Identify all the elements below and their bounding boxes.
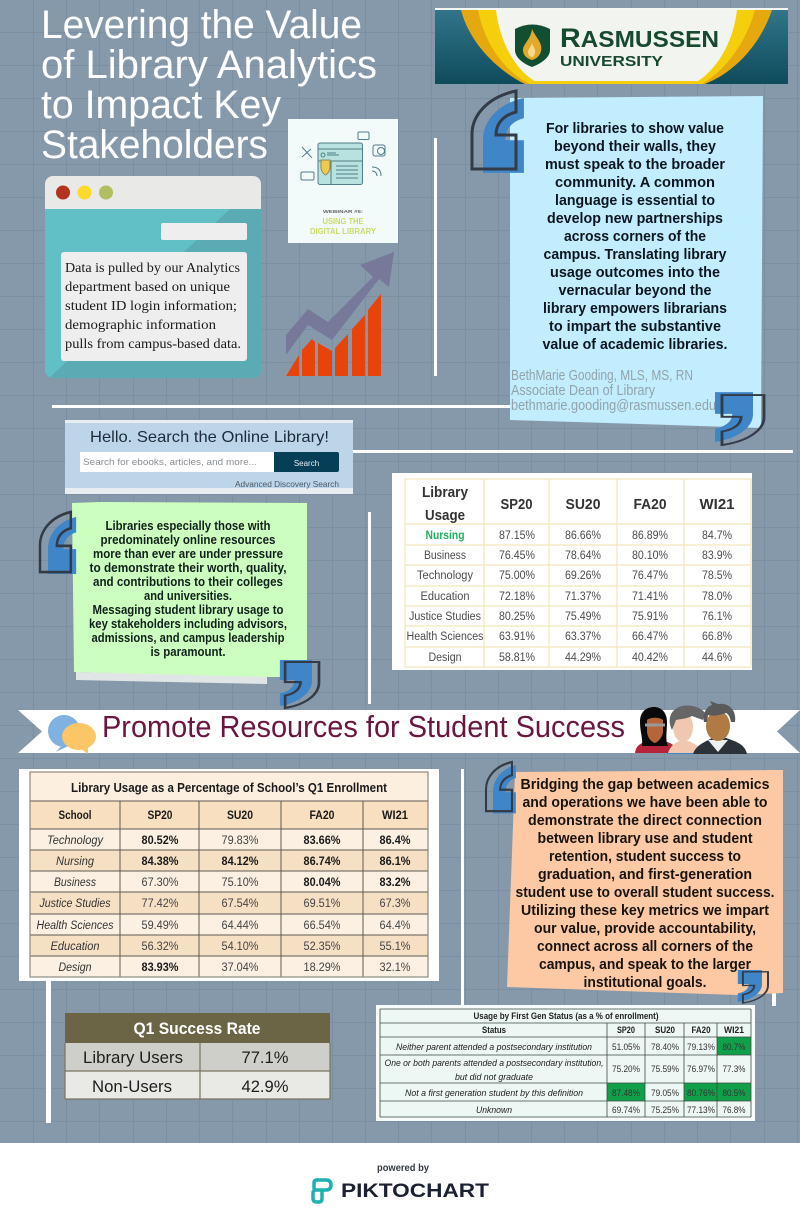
- table rows: 69.74%: [612, 1105, 640, 1116]
- table rows: 78.64%: [565, 550, 601, 562]
- table rows: 77.1%: [242, 1048, 288, 1067]
- text: quote body: predominately online resources: [100, 533, 276, 547]
- table rows: 32.1%: [380, 962, 410, 974]
- icon: opening quote mark: [40, 512, 76, 574]
- table rows: 77.13%: [687, 1105, 715, 1116]
- table rows: 76.97%: [687, 1064, 715, 1075]
- table rows: 84.12%: [222, 856, 258, 868]
- table rows: 52.35%: [304, 941, 340, 953]
- table rows: Technology: [417, 570, 473, 582]
- table rows: 80.04%: [304, 877, 340, 889]
- text: quote body: more than ever are under pressure: [93, 547, 283, 561]
- text: quote body: graduation, and first-generation: [538, 867, 752, 883]
- text: quote body: and operations we have been able to: [522, 795, 768, 811]
- table rows: 71.37%: [565, 591, 601, 603]
- search button: [274, 452, 339, 472]
- text: quote body: [89, 519, 287, 659]
- text: webinar caption: DIGITAL LIBRARY: [310, 227, 377, 236]
- text: quote body: is paramount.: [150, 645, 226, 659]
- table rows: Library Users: [83, 1048, 183, 1067]
- table rows: 63.37%: [565, 631, 601, 643]
- panel: green quote: [40, 502, 319, 708]
- table rows: 51.05%: [612, 1042, 640, 1053]
- text: quote body: student use to overall student success.: [516, 885, 774, 901]
- table rows: 67.54%: [222, 898, 258, 910]
- text: webinar caption: [310, 209, 377, 236]
- table rows: 66.47%: [632, 631, 668, 643]
- text: quote body: vernacular beyond the: [558, 283, 712, 299]
- table header: Library: [422, 484, 469, 501]
- table rows: [406, 530, 732, 664]
- table: Q1 success rate: [65, 1013, 330, 1099]
- title: to Impact Key: [41, 83, 281, 127]
- text: quote body: to impart the substantive: [549, 319, 721, 335]
- table rows: 64.44%: [222, 920, 258, 932]
- table rows: 44.29%: [565, 652, 601, 664]
- table rows: 75.91%: [632, 611, 668, 623]
- table rows: 18.29%: [304, 962, 340, 974]
- text: data source note: department based on unique: [65, 279, 230, 294]
- table rows: 63.91%: [499, 631, 535, 643]
- table rows: 37.04%: [222, 962, 258, 974]
- table rows: 72.18%: [499, 591, 535, 603]
- table rows: 80.10%: [632, 550, 668, 562]
- text: quote body: between library use and student: [538, 831, 753, 847]
- panel: webinar thumbnail: [288, 119, 398, 243]
- text: quote body: library empowers librarians: [543, 301, 727, 317]
- table rows: 80.25%: [499, 611, 535, 623]
- table rows: Not a first generation student by this definition: [405, 1088, 583, 1099]
- text: quote body: and universities.: [144, 589, 232, 603]
- icon: closing quote mark: [280, 660, 319, 708]
- text: Piktochart wordmark: PIKTOCHART: [341, 1180, 489, 1202]
- table rows: Education: [50, 941, 100, 953]
- text: quote body: Bridging the gap between academics: [520, 777, 770, 793]
- text: quote body: usage outcomes into the: [550, 265, 720, 281]
- table header: Usage: [425, 507, 465, 524]
- table rows: Non-Users: [92, 1077, 172, 1096]
- table rows: 59.49%: [142, 920, 178, 932]
- table rows: 67.3%: [380, 898, 410, 910]
- table: library usage by school: [392, 473, 752, 670]
- table rows: 79.83%: [222, 835, 258, 847]
- icon: digital library window: [301, 132, 385, 184]
- table rows: 83.2%: [380, 877, 410, 889]
- table rows: 64.4%: [380, 920, 410, 932]
- text: quote body: must speak to the broader: [545, 157, 725, 173]
- text: quote body: [542, 121, 728, 353]
- text: data source note: Data is pulled by our Analytics: [65, 260, 240, 275]
- title: Levering the Value: [41, 3, 362, 47]
- table rows: [36, 835, 410, 974]
- table rows: 83.66%: [304, 835, 340, 847]
- icon: Piktochart logo mark: [313, 1180, 331, 1202]
- text: quote body: across corners of the: [564, 229, 706, 245]
- text: attribution: Associate Dean of Library: [511, 383, 656, 399]
- table header: Status: [482, 1025, 506, 1036]
- heading: search prompt: Hello. Search the Online Library!: [90, 429, 329, 446]
- table rows: 76.45%: [499, 550, 535, 562]
- text: data source note: demographic information: [65, 317, 216, 332]
- table rows: 83.93%: [142, 962, 178, 974]
- text: quote body: Libraries especially those with: [106, 519, 270, 533]
- panel: online library search box: [65, 420, 353, 494]
- table rows: 75.49%: [565, 611, 601, 623]
- table header: SU20: [655, 1025, 675, 1036]
- text: quote body: Messaging student library usage to: [92, 603, 284, 617]
- table rows: [384, 1042, 746, 1116]
- table rows: Design: [58, 962, 92, 974]
- table rows: 77.3%: [722, 1064, 746, 1075]
- table rows: 44.6%: [702, 652, 732, 664]
- table rows: 86.4%: [380, 835, 410, 847]
- icon: shield with flame: [515, 24, 550, 67]
- table header: SP20: [617, 1025, 635, 1036]
- table rows: 75.20%: [612, 1064, 640, 1075]
- table rows: 66.8%: [702, 631, 732, 643]
- table rows: 80.52%: [142, 835, 178, 847]
- table rows: 83.9%: [702, 550, 732, 562]
- table rows: Nursing: [426, 530, 464, 542]
- text: data source note: pulls from campus-based data.: [65, 336, 241, 351]
- text: quote body: [516, 777, 774, 991]
- table rows: 69.26%: [565, 570, 601, 582]
- table header: SP20: [148, 810, 172, 822]
- table header: SP20: [500, 496, 532, 513]
- text: quote body: community. A common: [555, 175, 715, 191]
- table rows: Health Sciences: [406, 631, 484, 643]
- footer: powered by Piktochart: powered by: [377, 1163, 429, 1174]
- icon: speech bubbles: [48, 715, 96, 754]
- table rows: 86.74%: [304, 856, 340, 868]
- table rows: 55.1%: [380, 941, 410, 953]
- text: quote body: institutional goals.: [584, 975, 706, 991]
- table rows: One or both parents attended a postsecondary institution,: [384, 1058, 604, 1069]
- table rows: 69.51%: [304, 898, 340, 910]
- section banner: promote resources: [18, 701, 800, 754]
- icon: three students: [635, 701, 747, 754]
- table rows: 86.1%: [380, 856, 410, 868]
- title: of Library Analytics: [41, 43, 377, 87]
- text: quote body: to demonstrate their worth, quality,: [90, 561, 286, 575]
- text: quote body: language is essential to: [555, 193, 715, 209]
- table rows: 58.81%: [499, 652, 535, 664]
- table header: Q1 Success Rate: [134, 1019, 260, 1038]
- icon: closing quote mark: [738, 970, 768, 1003]
- panel: orange quote: [486, 762, 783, 1003]
- table rows: Business: [54, 877, 96, 889]
- search input: [80, 452, 274, 472]
- table rows: but did not graduate: [455, 1072, 533, 1083]
- text: attribution: bethmarie.gooding@rasmussen.edu: [511, 398, 716, 414]
- table rows: 79.05%: [651, 1088, 679, 1099]
- table header: [58, 810, 409, 822]
- table header: WI21: [724, 1025, 745, 1036]
- table rows: 78.0%: [702, 591, 732, 603]
- table: usage as percentage of Q1 enrollment: [19, 769, 439, 981]
- text: webinar caption: USING THE: [322, 217, 364, 226]
- search button: Search: [294, 459, 319, 468]
- heading: section title: Promote Resources for Student Success: [102, 709, 625, 744]
- table rows: 87.15%: [499, 530, 535, 542]
- table rows: 75.59%: [651, 1064, 679, 1075]
- text: quote body: demonstrate the direct connection: [528, 813, 762, 829]
- table rows: 80.7%: [722, 1042, 746, 1053]
- search input: Search for ebooks, articles, and more...: [83, 457, 257, 468]
- table rows: Nursing: [56, 856, 95, 868]
- text: university name: UNIVERSITY: [560, 53, 663, 70]
- text: quote body: admissions, and campus leadership: [92, 631, 285, 645]
- title: Stakeholders: [41, 123, 268, 167]
- table rows: 40.42%: [632, 652, 668, 664]
- table rows: 78.5%: [702, 570, 732, 582]
- table rows: 71.41%: [632, 591, 668, 603]
- table rows: 54.10%: [222, 941, 258, 953]
- table rows: Health Sciences: [36, 920, 114, 932]
- logo: Rasmussen University banner: [435, 8, 788, 84]
- table rows: 80.5%: [722, 1088, 746, 1099]
- divider lines: [46, 138, 793, 1123]
- table rows: 86.89%: [632, 530, 668, 542]
- table rows: 56.32%: [142, 941, 178, 953]
- footer: powered by Piktochart: [0, 1143, 800, 1223]
- table title: Usage by First Gen Status (as a % of enrollment): [474, 1011, 658, 1022]
- text: university name: RASMUSSEN: [560, 23, 719, 53]
- table rows: [83, 1048, 288, 1096]
- table rows: 66.54%: [304, 920, 340, 932]
- text: quote body: key stakeholders including advisors,: [89, 617, 287, 631]
- table header: [482, 1025, 745, 1036]
- text: attribution: [511, 368, 716, 414]
- text: quote body: campus, and speak to the larger: [539, 957, 751, 973]
- table rows: Technology: [47, 835, 104, 847]
- table rows: 84.38%: [142, 856, 178, 868]
- table title: Library Usage as a Percentage of School’s Q1 Enrollment: [71, 780, 388, 795]
- table rows: 42.9%: [242, 1077, 288, 1096]
- panel: browser window with data note: [45, 176, 261, 378]
- icon: closing quote mark: [715, 392, 764, 445]
- table header: FA20: [634, 496, 666, 513]
- table rows: 84.7%: [702, 530, 732, 542]
- text: quote body: Utilizing these key metrics we impart: [521, 903, 769, 919]
- text: quote body: and contributions to their colleges: [93, 575, 283, 589]
- table rows: Business: [424, 550, 466, 562]
- table header: WI21: [382, 810, 409, 822]
- text: attribution: BethMarie Gooding, MLS, MS, RN: [511, 368, 693, 384]
- icon: growth arrow and bar chart: [286, 252, 394, 376]
- table rows: 76.1%: [702, 611, 732, 623]
- text: webinar caption: WEBINAR #5:: [323, 209, 364, 215]
- table header: FA20: [310, 810, 334, 822]
- text: data source note: student ID login information;: [65, 298, 237, 313]
- icon: opening quote mark: [472, 91, 524, 173]
- table header: [422, 484, 734, 524]
- table rows: 75.10%: [222, 877, 258, 889]
- text: quote body: For libraries to show value: [546, 121, 724, 137]
- table rows: 76.47%: [632, 570, 668, 582]
- table rows: Unknown: [476, 1105, 512, 1116]
- table rows: Neither parent attended a postsecondary institution: [396, 1042, 592, 1053]
- table rows: 76.8%: [722, 1105, 746, 1116]
- text: quote body: develop new partnerships: [547, 211, 723, 227]
- table header: School: [58, 810, 92, 822]
- table rows: Education: [420, 591, 470, 603]
- table rows: 75.00%: [499, 570, 535, 582]
- text: university name: [560, 23, 719, 70]
- table rows: 87.48%: [612, 1088, 640, 1099]
- text: quote body: our value, provide accountability,: [534, 921, 756, 937]
- text: quote body: retention, student success to: [549, 849, 741, 865]
- table header: SU20: [227, 810, 253, 822]
- text: quote body: campus. Translating library: [544, 247, 726, 263]
- table rows: Design: [428, 652, 462, 664]
- icon: opening quote mark: [486, 762, 516, 813]
- text: quote body: value of academic libraries.: [542, 337, 728, 353]
- table rows: 79.13%: [687, 1042, 715, 1053]
- table rows: 75.25%: [651, 1105, 679, 1116]
- link: advanced search: Advanced Discovery Search: [235, 480, 339, 489]
- table rows: 77.42%: [142, 898, 178, 910]
- table header: FA20: [692, 1025, 710, 1036]
- panel: blue quote: [472, 91, 764, 445]
- table rows: 86.66%: [565, 530, 601, 542]
- table: usage by first generation status: [376, 1005, 755, 1121]
- table rows: 67.30%: [142, 877, 178, 889]
- table rows: Justice Studies: [409, 611, 481, 623]
- text: quote body: beyond their walls, they: [554, 139, 716, 155]
- text: quote body: connect across all corners of the: [537, 939, 753, 955]
- table header: WI21: [700, 496, 734, 513]
- table rows: 78.40%: [651, 1042, 679, 1053]
- title: [41, 3, 377, 167]
- table rows: 80.76%: [687, 1088, 715, 1099]
- table header: SU20: [566, 496, 600, 513]
- table rows: Justice Studies: [39, 898, 111, 910]
- text: data source note: [65, 260, 241, 351]
